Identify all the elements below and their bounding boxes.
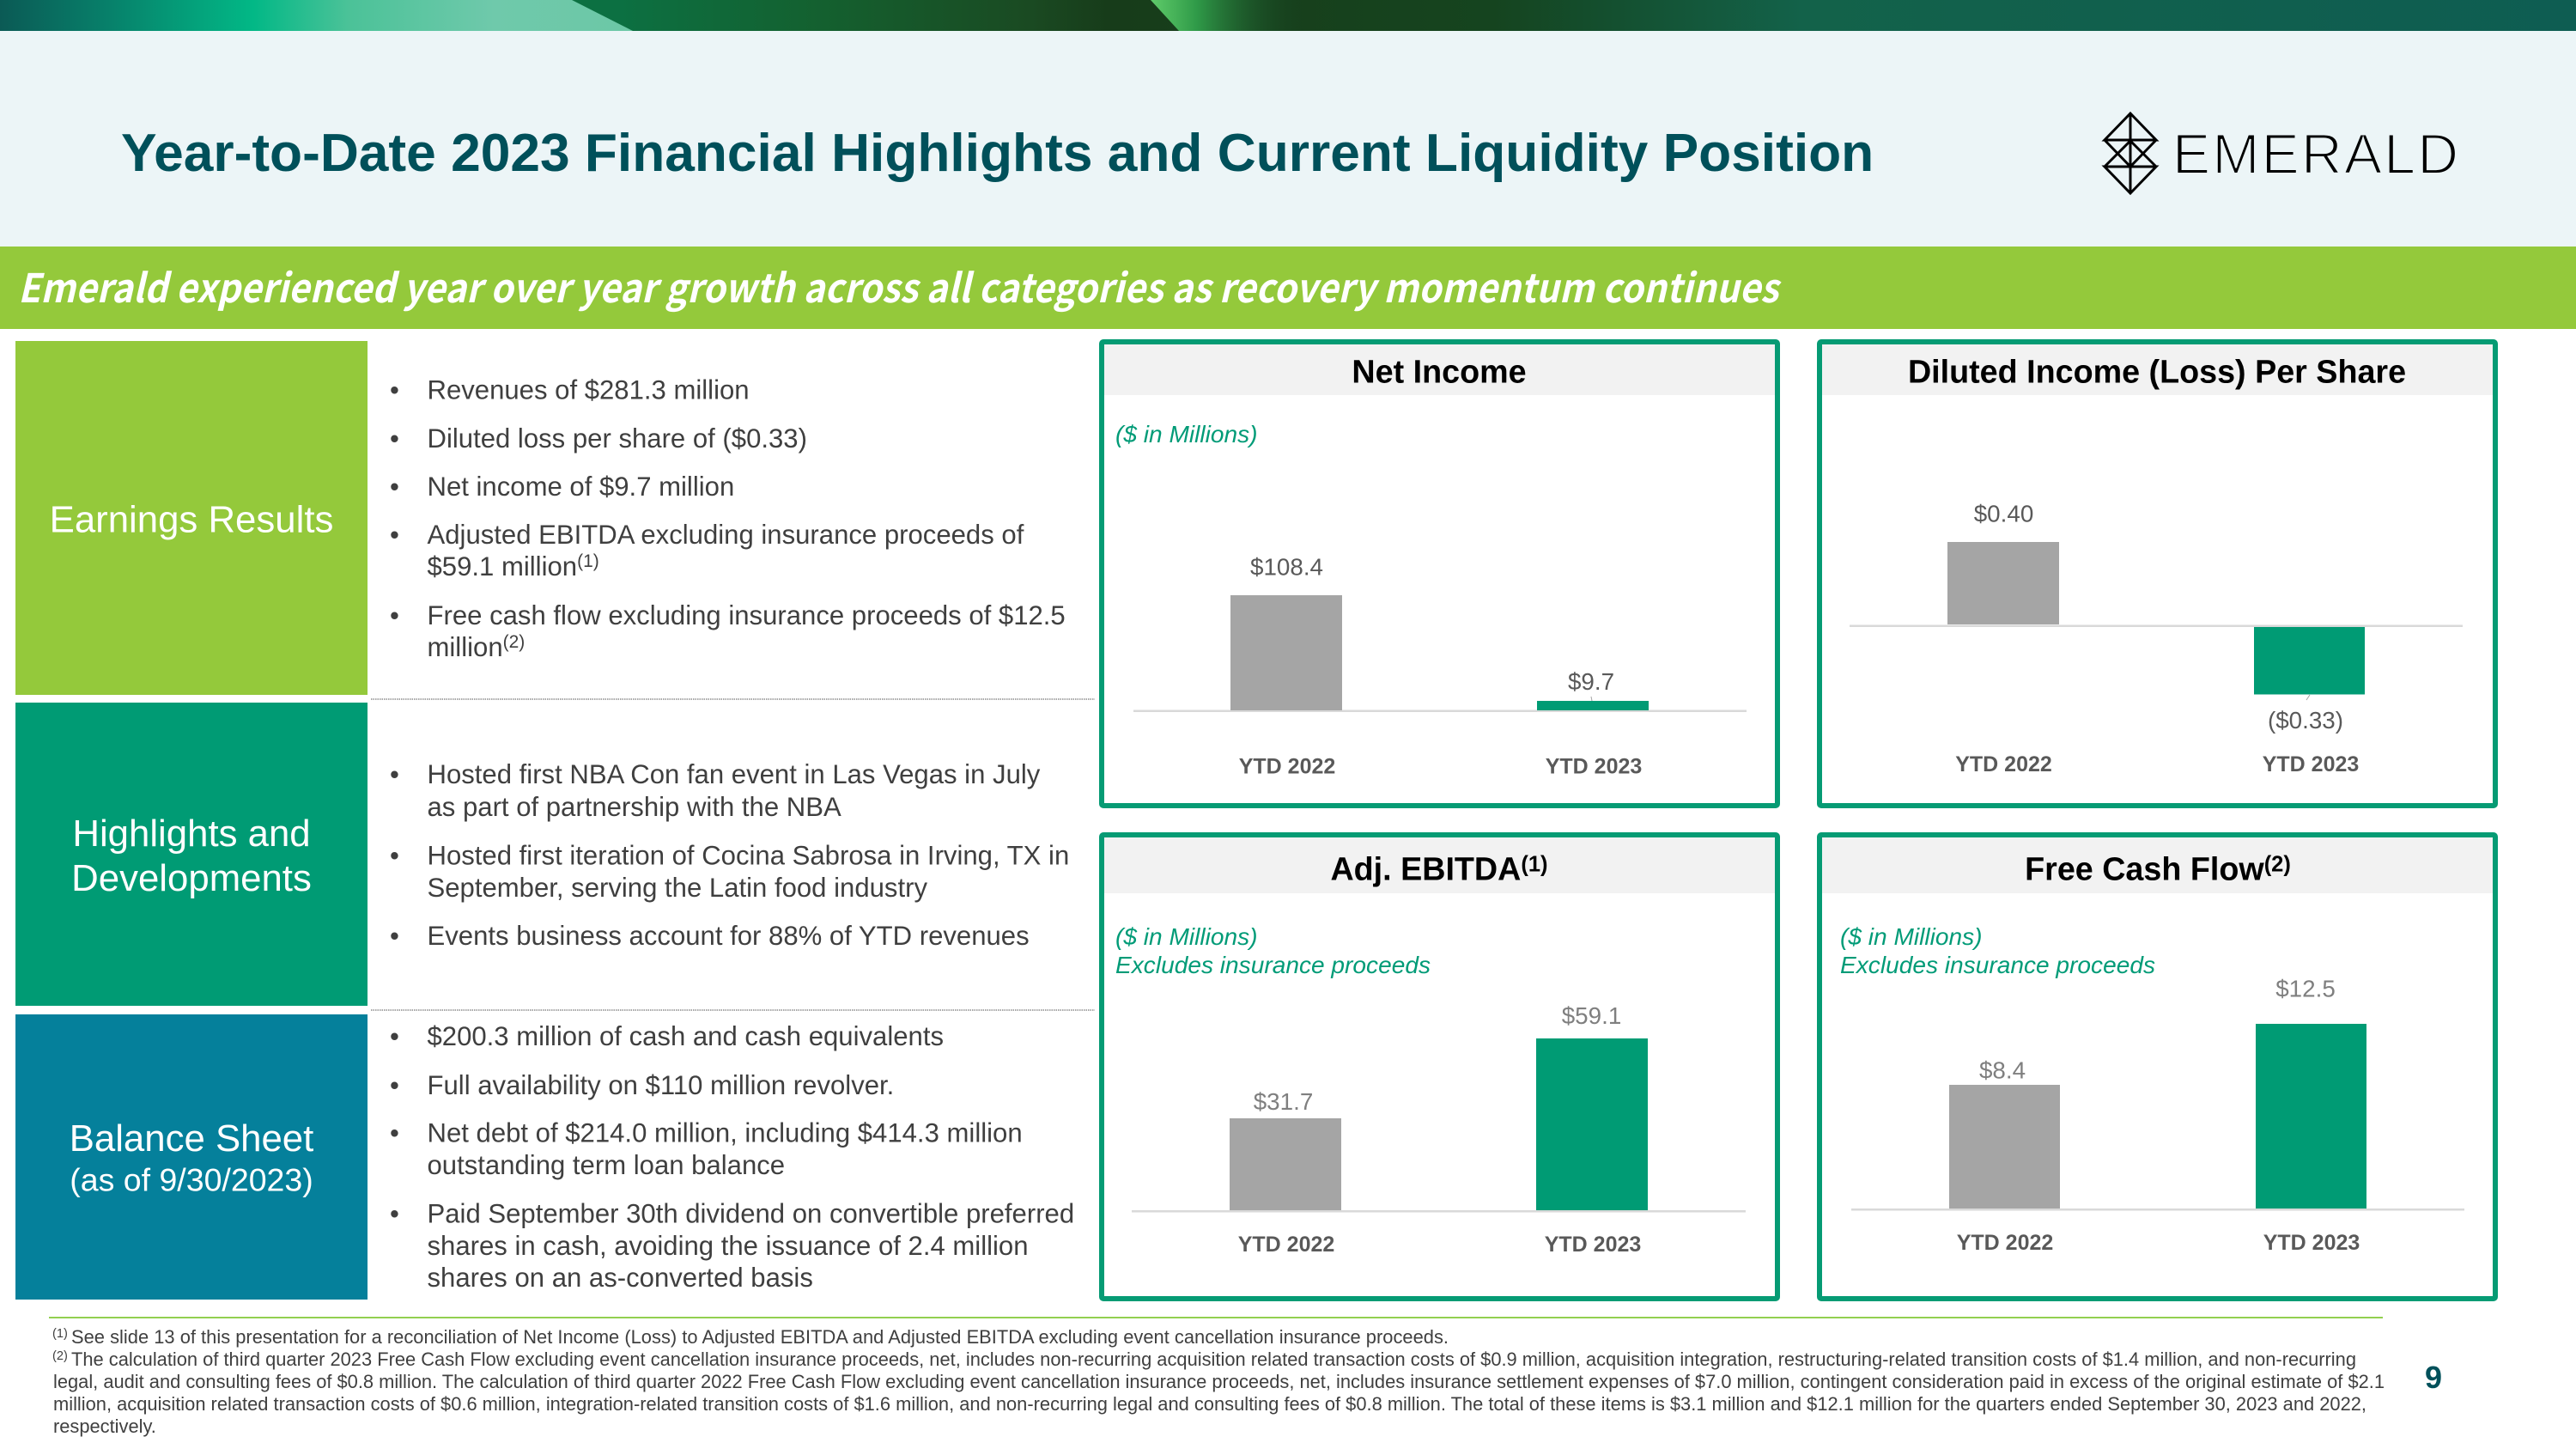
text block: highlights bullets: Hosted first NBA Con fan event in Las Vegas in July: [428, 759, 1041, 789]
text block: earnings results bullets: •: [390, 520, 399, 550]
panel: earnings results label: [15, 341, 368, 695]
bar chart: net income: $108.4: [1250, 553, 1323, 581]
bar chart: free cash flow: YTD 2022: [1957, 1231, 2053, 1255]
bar chart: diluted EPS: [1850, 500, 2463, 776]
panel: earnings results label: Earnings Results: [50, 498, 333, 541]
text block: earnings results bullets: Diluted loss per share of ($0.33): [428, 423, 807, 454]
bar chart: adj. EBITDA: YTD 2023: [1545, 1233, 1641, 1257]
text block: highlights bullets: [390, 759, 1069, 951]
text block: highlights bullets: •: [390, 921, 399, 951]
bar chart: diluted EPS: ($0.33): [2268, 707, 2343, 734]
page number: 9: [2425, 1360, 2442, 1395]
text block: highlights bullets: •: [390, 759, 399, 789]
text block: balance sheet bullets: shares on an as-converted basis: [428, 1263, 813, 1293]
icon: emerald diamonds: [2105, 113, 2156, 193]
bar chart: adj. EBITDA: [1132, 1002, 1746, 1257]
text block: earnings results bullets: Net income of $9.7 million: [428, 472, 734, 502]
bar chart: net income: [1133, 553, 1747, 778]
subtitle banner: Emerald experienced year over year growth across all categories as recovery momentum continues: [18, 258, 1782, 314]
text block: highlights bullets: Hosted first iteration of Cocina Sabrosa in Irving, TX in: [428, 840, 1069, 871]
bar chart: free cash flow: $12.5: [2275, 976, 2336, 1002]
bar chart: free cash flow: $8.4: [1979, 1056, 2026, 1084]
heading: Diluted Income (Loss) Per Share: [1908, 354, 2406, 390]
bar chart: diluted EPS: YTD 2022: [1955, 752, 2052, 776]
bar chart: net income: YTD 2023: [1546, 754, 1642, 778]
panel: highlights and developments label: Developments: [71, 857, 312, 899]
unit note: Excludes insurance proceeds: [1115, 952, 1431, 978]
bar chart: free cash flow: [1851, 976, 2464, 1255]
heading: Adj. EBITDA: [1330, 850, 1521, 886]
panel: balance sheet label: (as of 9/30/2023): [70, 1161, 313, 1197]
text block: balance sheet bullets: outstanding term loan balance: [428, 1150, 785, 1180]
unit note: ($ in Millions): [1115, 923, 1257, 950]
text block: earnings results bullets: Revenues of $281.3 million: [428, 374, 750, 405]
bar chart: net income: YTD 2022: [1239, 754, 1335, 778]
heading: (1): [1521, 852, 1548, 876]
panel: free cash flow: [1820, 835, 2495, 1299]
text block: highlights bullets: Events business account for 88% of YTD revenues: [428, 921, 1030, 951]
text block: balance sheet bullets: Paid September 30th dividend on convertible preferred: [428, 1199, 1074, 1228]
unit note: [1115, 923, 1431, 978]
text block: earnings results bullets: (2): [503, 632, 525, 652]
heading: Net Income: [1352, 354, 1527, 390]
text block: earnings results bullets: •: [390, 600, 399, 630]
text block: earnings results bullets: Adjusted EBITDA excluding insurance proceeds of: [428, 520, 1024, 550]
unit note: ($ in Millions): [1115, 421, 1257, 447]
panel: highlights and developments label: Highlights and: [72, 813, 311, 855]
bar chart: adj. EBITDA: $59.1: [1562, 1002, 1621, 1029]
footnotes: See slide 13 of this presentation for a reconciliation of Net Income (Loss) to Adjusted EBITDA and Adjusted EBITDA excluding event cancellation insurance proceeds.: [71, 1326, 1449, 1348]
text block: earnings results bullets: •: [390, 472, 399, 502]
text block: highlights bullets: September, serving the Latin food industry: [428, 873, 927, 903]
heading: (2): [2264, 852, 2291, 876]
text block: earnings results bullets: [390, 374, 1066, 662]
text block: earnings results bullets: •: [390, 374, 399, 405]
footnotes: The calculation of third quarter 2023 Free Cash Flow excluding event cancellation insurance proceeds, net, includes non-recurring acquisition related transaction costs of $0.9 million, acquisition integration, restructuring-related transition costs of $1.4 million, and non-recurring: [71, 1349, 2356, 1370]
text block: highlights bullets: •: [390, 840, 399, 871]
footnotes: legal, audit and consulting fees of $0.8 million. The calculation of third quarter 2022 Free Cash Flow excluding event cancellation insurance proceeds, net, includes insurance settlement expenses of $7.0 million, contingent consideration paid in excess of the original estimate of $2.1: [53, 1371, 2385, 1392]
bar chart: diluted EPS: $0.40: [1974, 500, 2033, 527]
text block: earnings results bullets: $59.1 million: [428, 551, 577, 581]
text block: balance sheet bullets: •: [390, 1199, 399, 1228]
title: Year-to-Date 2023 Financial Highlights and Current Liquidity Position: [121, 124, 1874, 183]
panel: diluted income (loss) per share: [1820, 342, 2495, 806]
top gradient band: [0, 0, 2576, 31]
footnotes: respectively.: [53, 1416, 156, 1437]
panel: highlights and developments label: [15, 703, 368, 1006]
text block: balance sheet bullets: $200.3 million of cash and cash equivalents: [428, 1021, 944, 1051]
text block: highlights bullets: as part of partnership with the NBA: [428, 792, 841, 822]
text block: balance sheet bullets: •: [390, 1021, 399, 1051]
unit note: Excludes insurance proceeds: [1840, 952, 2155, 978]
text block: earnings results bullets: million: [428, 632, 503, 662]
text block: balance sheet bullets: •: [390, 1070, 399, 1100]
text block: earnings results bullets: •: [390, 423, 399, 454]
header background: [0, 31, 2576, 247]
footnotes: million, acquisition related transaction costs of $0.6 million, integration-related transition costs of $1.6 million, and non-recurring legal and consulting fees of $0.8 million. The total of these items is $3.1 million and $12.1 million for the quarters ended September 30, 2023 and 2022,: [53, 1393, 2366, 1415]
unit note: ($ in Millions): [1840, 923, 1982, 950]
wordmark: EMERALD: [2172, 122, 2458, 186]
text block: balance sheet bullets: Net debt of $214.0 million, including $414.3 million: [428, 1118, 1023, 1148]
heading: Free Cash Flow: [2025, 850, 2264, 886]
bar chart: net income: $9.7: [1568, 668, 1614, 695]
panel: adj. EBITDA: [1102, 835, 1777, 1299]
bar chart: adj. EBITDA: YTD 2022: [1238, 1233, 1334, 1257]
footnotes: (1): [52, 1327, 68, 1341]
text block: balance sheet bullets: Full availability on $110 million revolver.: [428, 1070, 894, 1100]
unit note: [1840, 923, 2155, 978]
text block: earnings results bullets: (1): [577, 551, 599, 571]
panel: net income: [1102, 342, 1777, 806]
bar chart: free cash flow: YTD 2023: [2263, 1231, 2360, 1255]
panel: balance sheet label: Balance Sheet: [70, 1117, 313, 1160]
panel: balance sheet label: [15, 1014, 368, 1300]
logo: Emerald: [2105, 113, 2458, 193]
text block: earnings results bullets: Free cash flow excluding insurance proceeds of $12.5: [428, 600, 1066, 630]
footnotes: (2): [52, 1349, 68, 1363]
subtitle banner: [0, 247, 2576, 329]
bar chart: adj. EBITDA: $31.7: [1254, 1088, 1313, 1115]
bar chart: diluted EPS: YTD 2023: [2263, 752, 2359, 776]
text block: balance sheet bullets: [390, 1021, 1074, 1293]
text block: balance sheet bullets: shares in cash, avoiding the issuance of 2.4 million: [428, 1231, 1029, 1261]
footnotes: [52, 1326, 2385, 1437]
text block: balance sheet bullets: •: [390, 1118, 399, 1148]
